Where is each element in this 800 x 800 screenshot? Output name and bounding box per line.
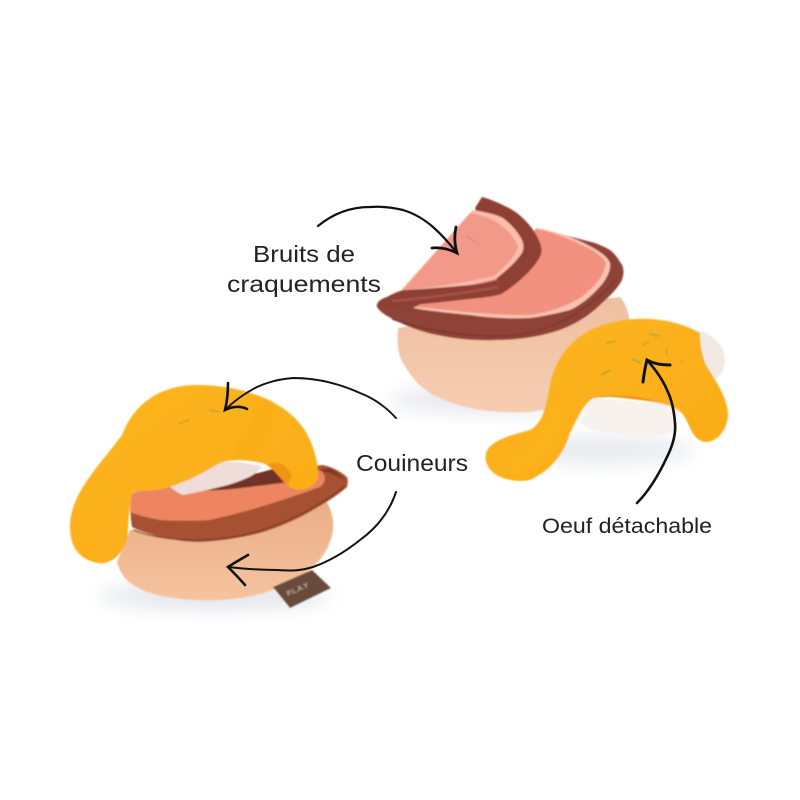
arrow: to muffin squeaker <box>228 492 396 585</box>
egg white <box>695 330 725 380</box>
label: Oeuf détachable: Oeuf détachable <box>542 515 712 538</box>
egg white <box>170 462 262 495</box>
muffin base <box>398 297 629 412</box>
ham lower pink <box>413 228 610 318</box>
ham pink flap <box>401 210 524 290</box>
label: Couineurs: Couineurs <box>356 450 468 476</box>
ham lower slice <box>377 228 624 340</box>
yolk stitches <box>601 334 683 375</box>
brand tag <box>273 570 331 608</box>
toy: detachable egg <box>486 319 728 481</box>
yolk <box>70 385 318 563</box>
arrow: to detachable egg <box>637 360 675 503</box>
toy: ham and muffin top right <box>377 197 629 414</box>
yolk folds <box>267 462 292 485</box>
ham slice <box>130 465 348 542</box>
infographic canvas <box>68 196 730 614</box>
brand tag: P.L.A.Y <box>286 582 310 598</box>
label: Bruits de craquements: craquements <box>227 271 381 297</box>
toy: assembled with egg, ham and muffin <box>70 385 348 610</box>
label: Bruits de craquements <box>227 241 381 297</box>
yolk stitches <box>178 410 220 424</box>
ham top flap <box>377 197 542 310</box>
arrow: to ham crackle <box>318 207 457 253</box>
label: Bruits de craquements: Bruits de <box>253 241 355 267</box>
muffin base <box>117 502 333 600</box>
yolk <box>486 319 728 481</box>
arrow: to egg squeaker <box>225 378 396 418</box>
ham dark gap <box>205 469 290 490</box>
yolk folds <box>590 395 662 404</box>
